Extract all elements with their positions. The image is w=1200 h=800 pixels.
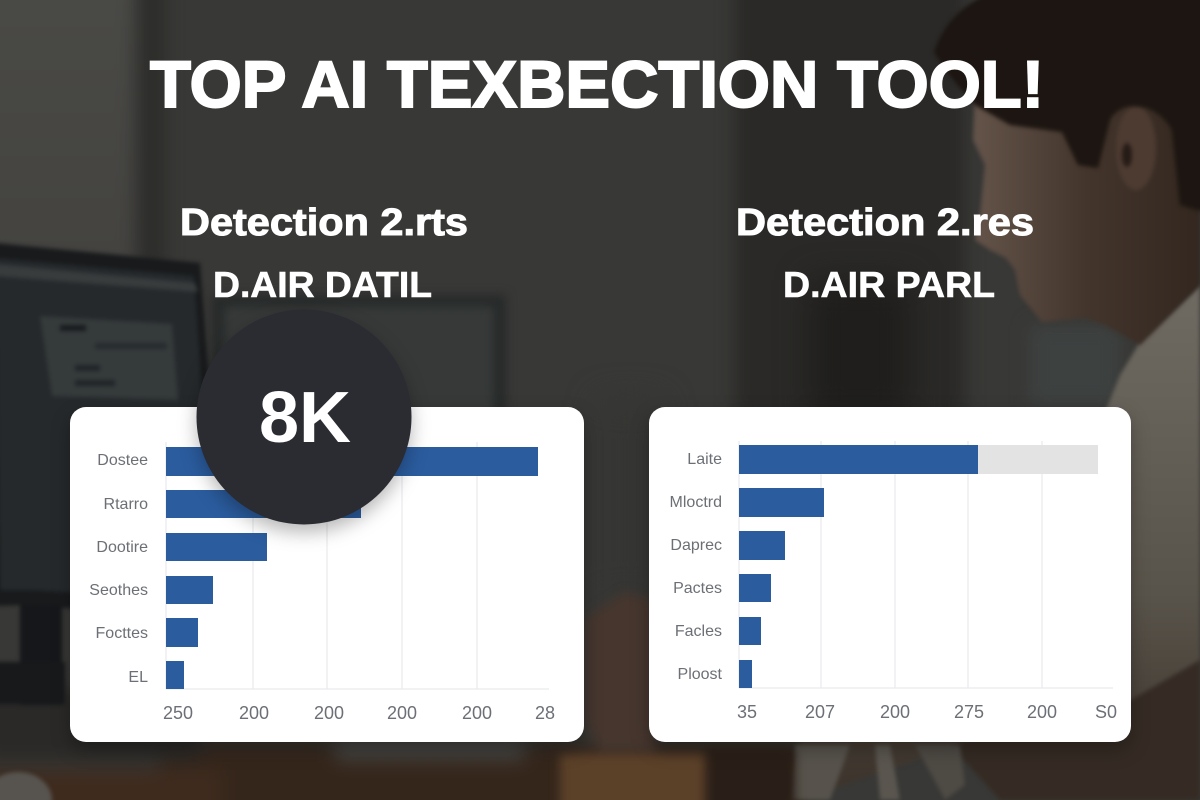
left chart category labels: Dostee [97,452,148,469]
right chart axis values: 275 [954,702,984,722]
left chart category labels: Focttes [96,625,148,642]
left chart axis values: 200 [239,703,269,723]
left chart axis values: 200 [387,703,417,723]
left chart gridlines [166,442,549,689]
right chart category labels: Laite [687,451,722,468]
right chart axis values: 200 [880,702,910,722]
left chart category labels [89,452,148,686]
person: hair [934,0,1200,212]
right subheading: D.AIR PARL [783,264,995,305]
callout: 8K stat circle [196,310,412,524]
right chart axis values: S0 [1095,702,1117,722]
right heading: detection: Detection 2.res [736,202,1034,244]
left chart category labels: Rtarro [104,496,148,513]
left chart axis values [163,703,555,723]
right chart category labels: Ploost [678,666,723,683]
right chart axis values: 35 [737,702,757,722]
right chart category labels: Daprec [670,537,722,554]
right chart category labels: Facles [675,623,722,640]
left chart category labels: Dootire [96,539,148,556]
panel: right bar chart [649,407,1131,742]
person: hand [560,592,795,800]
right chart gridlines [739,441,1113,688]
left chart axis values: 200 [462,703,492,723]
right chart category labels: Mloctrd [670,494,722,511]
right chart category labels [670,451,723,683]
person: shirt [790,285,1200,800]
panel: left bar chart [70,407,584,742]
left subheading: D.AIR DATIL [213,264,432,305]
main monitor [0,243,228,800]
right chart axis values: 207 [805,702,835,722]
callout: 8K stat circle: 8K [259,378,351,458]
left chart axis values: 250 [163,703,193,723]
title: TOP AI TEXBECTION TOOL! [150,47,1044,121]
person: neck and face [973,40,1200,345]
left chart category labels: EL [128,669,148,686]
left chart category labels: Seothes [89,582,148,599]
left chart axis values: 200 [314,703,344,723]
right chart axis values [737,702,1117,722]
left chart bars [166,447,538,689]
right chart category labels: Pactes [673,580,722,597]
right chart axis values: 200 [1027,702,1057,722]
right chart bars [739,445,1098,688]
left heading: detection: Detection 2.rts [180,202,468,244]
second monitor [212,295,506,420]
left chart axis values: 28 [535,703,555,723]
